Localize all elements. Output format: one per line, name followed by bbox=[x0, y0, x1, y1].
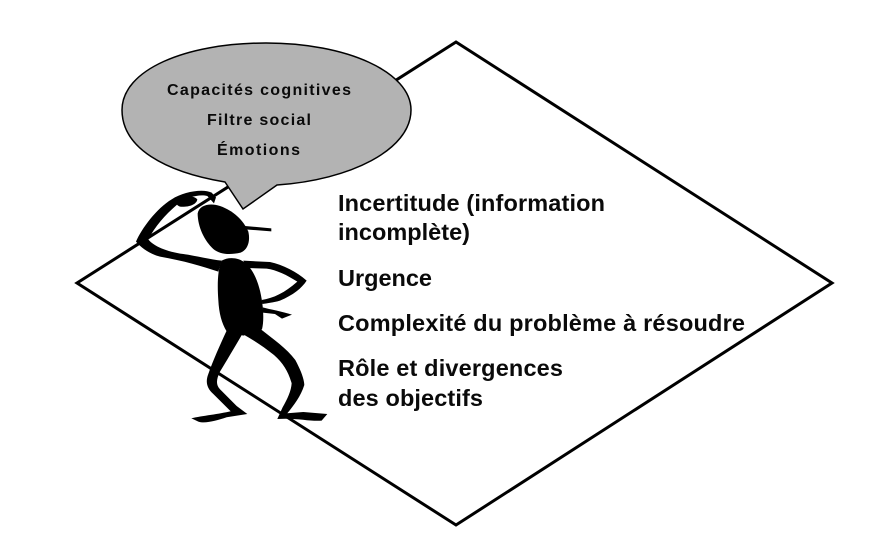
bubble text: Capacités cognitives bbox=[167, 82, 351, 99]
item: complexity: Complexité du problème à résoudre bbox=[338, 310, 745, 336]
speech bubble bbox=[122, 43, 411, 209]
bubble text: Filtre social bbox=[207, 112, 311, 129]
left leg and foot bbox=[191, 331, 247, 422]
bubble text: Émotions bbox=[217, 140, 300, 159]
right leg and foot bbox=[243, 329, 327, 421]
other hand bbox=[263, 307, 292, 319]
list text bbox=[338, 190, 745, 411]
item: role: Rôle et divergences bbox=[338, 355, 563, 381]
arm on hip bbox=[243, 261, 307, 304]
diamond bbox=[77, 42, 832, 525]
head bbox=[198, 205, 249, 254]
raised arm bbox=[136, 191, 222, 272]
bubble text bbox=[167, 82, 351, 159]
icon: thinking stick figure bbox=[136, 191, 327, 422]
hand bbox=[176, 196, 197, 207]
item: urgency: Urgence bbox=[338, 265, 432, 291]
torso bbox=[218, 258, 263, 336]
list text: incomplète) bbox=[338, 219, 470, 245]
nose bbox=[245, 226, 271, 231]
list text: des objectifs bbox=[338, 385, 483, 411]
item: uncertainty: Incertitude (information bbox=[338, 190, 605, 216]
